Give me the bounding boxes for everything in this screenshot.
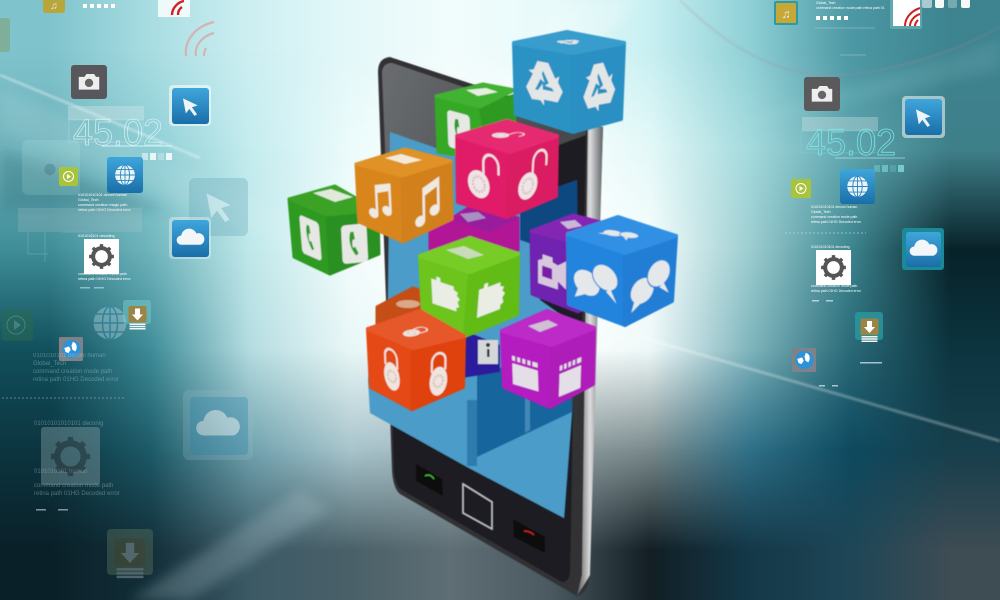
dark screen upper right bbox=[540, 135, 586, 330]
panel: grey readout bbox=[18, 208, 142, 262]
icon: cloud bbox=[902, 228, 944, 270]
code text: Global_Tech bbox=[811, 210, 831, 214]
cube: magenta clapper bbox=[502, 311, 594, 407]
HUD right bbox=[774, 0, 970, 386]
top status text bbox=[815, 1, 885, 55]
icon: download bbox=[855, 312, 883, 342]
cube: green phone (left) bbox=[289, 186, 379, 274]
icon: music top left: ♫ bbox=[50, 1, 58, 12]
cube: green phone (top) bbox=[436, 84, 515, 160]
dark blue tile bbox=[463, 330, 500, 378]
top status text: command creation mode path retina path 01 bbox=[816, 6, 885, 10]
icon: gear bbox=[84, 239, 119, 274]
code text block: 0101010101 decoding bbox=[78, 234, 115, 238]
button: home bbox=[463, 484, 492, 529]
icon: ghost gear bbox=[41, 427, 100, 485]
button: hang up bbox=[513, 519, 545, 553]
ghost green panel bbox=[0, 18, 10, 52]
code text: 010101010101 decoding bbox=[811, 245, 850, 249]
phone metal edge bbox=[577, 125, 603, 596]
icon: earth bbox=[59, 337, 83, 361]
small squares bbox=[142, 153, 172, 160]
icon: music bbox=[774, 1, 798, 25]
ghost camera panel bbox=[22, 140, 80, 195]
phone body bbox=[378, 57, 603, 596]
ghost code text: retina path 01HG Decoded error bbox=[34, 491, 120, 497]
code text: retina path 01HG Decoded error bbox=[811, 289, 862, 293]
icon: music top left bbox=[43, 0, 65, 13]
top status text: Global_Tech bbox=[816, 1, 836, 5]
cube: lime puzzle bbox=[420, 238, 518, 336]
code text block: Global_Tech bbox=[78, 198, 98, 202]
cube: recycle blue bbox=[514, 32, 624, 132]
icon: download bbox=[123, 300, 151, 330]
icon: globe bbox=[840, 169, 875, 204]
icon: wifi top bbox=[158, 0, 190, 17]
code text block: 010101010101 deconi human bbox=[78, 193, 127, 197]
cube: orange music bbox=[356, 149, 452, 242]
icon: cloud bbox=[169, 217, 211, 259]
code text block: retina path 01HG Decoded error bbox=[78, 277, 131, 281]
ghost code text: 01010101010101 deconig bbox=[34, 421, 103, 427]
digital clock: 45.02 bbox=[73, 112, 163, 153]
cube: chat blue bbox=[568, 217, 676, 325]
icon: ghost cloud bbox=[183, 390, 253, 460]
icon: play bbox=[59, 167, 78, 186]
digital clock: 45.02 bbox=[806, 122, 896, 163]
icon: earth bbox=[792, 348, 816, 372]
HUD left bbox=[0, 0, 253, 578]
code text block bbox=[78, 193, 131, 281]
icon: pale wifi bbox=[186, 22, 214, 56]
icon: ghost globe bbox=[94, 306, 126, 340]
smartphone bbox=[368, 56, 603, 596]
ghost code text: command creation mode path bbox=[34, 483, 113, 489]
cube: red lock bbox=[368, 311, 464, 409]
code text block: command creation mode path bbox=[78, 272, 127, 276]
ghost code text: 0101010101 deconi human bbox=[33, 353, 106, 359]
code text: command creation mode path bbox=[811, 284, 857, 288]
recessed screen panel bbox=[477, 360, 572, 457]
icon: ghost play bbox=[2, 310, 33, 341]
top squares bbox=[922, 0, 970, 8]
phone top glint bbox=[392, 56, 530, 100]
icon: cursor bbox=[169, 85, 211, 126]
dotted line bbox=[2, 397, 125, 399]
icon: camera bbox=[71, 65, 107, 99]
ghost code text: command creation mode path bbox=[33, 369, 112, 375]
icon: ghost download bbox=[107, 529, 153, 578]
code text: 010101010101 deconi human bbox=[811, 205, 857, 209]
screen blue content bbox=[368, 132, 572, 518]
icon: music: ♫ bbox=[782, 7, 790, 21]
status dots bbox=[83, 4, 115, 8]
ghost code text: retina path 01HG Decoded error bbox=[33, 377, 119, 383]
code text block: command creation magic path bbox=[78, 203, 127, 207]
ghost code text bbox=[33, 353, 120, 497]
code text block: retina path 01HG Decoded error bbox=[78, 208, 131, 212]
cube: purple video bbox=[531, 215, 600, 312]
ghost code text: 0101010101 human bbox=[34, 469, 87, 475]
icon: wifi bbox=[890, 0, 922, 29]
icon: cursor bbox=[902, 96, 945, 138]
small dashes bbox=[36, 287, 104, 510]
small dashes bbox=[812, 300, 882, 386]
cube: back orange bbox=[377, 288, 442, 330]
icon: globe bbox=[107, 157, 143, 193]
cube: back magenta bbox=[430, 207, 518, 250]
button: call bbox=[416, 464, 443, 496]
app cubes bbox=[289, 32, 676, 409]
icon: play bbox=[791, 179, 811, 198]
icon: gear bbox=[816, 250, 851, 285]
bottom bezel bbox=[392, 410, 573, 582]
cube: pink lock bbox=[457, 121, 557, 217]
code text bbox=[811, 205, 862, 293]
code text: retina path 01HG Decoded error bbox=[811, 220, 862, 224]
code text: command creation mode path bbox=[811, 215, 857, 219]
ghost cursor panel bbox=[189, 178, 248, 236]
ghost code text: Global_Tech bbox=[33, 361, 66, 367]
small squares bbox=[874, 165, 904, 172]
icon: camera bbox=[804, 77, 840, 111]
phone screen glass bbox=[382, 63, 586, 576]
